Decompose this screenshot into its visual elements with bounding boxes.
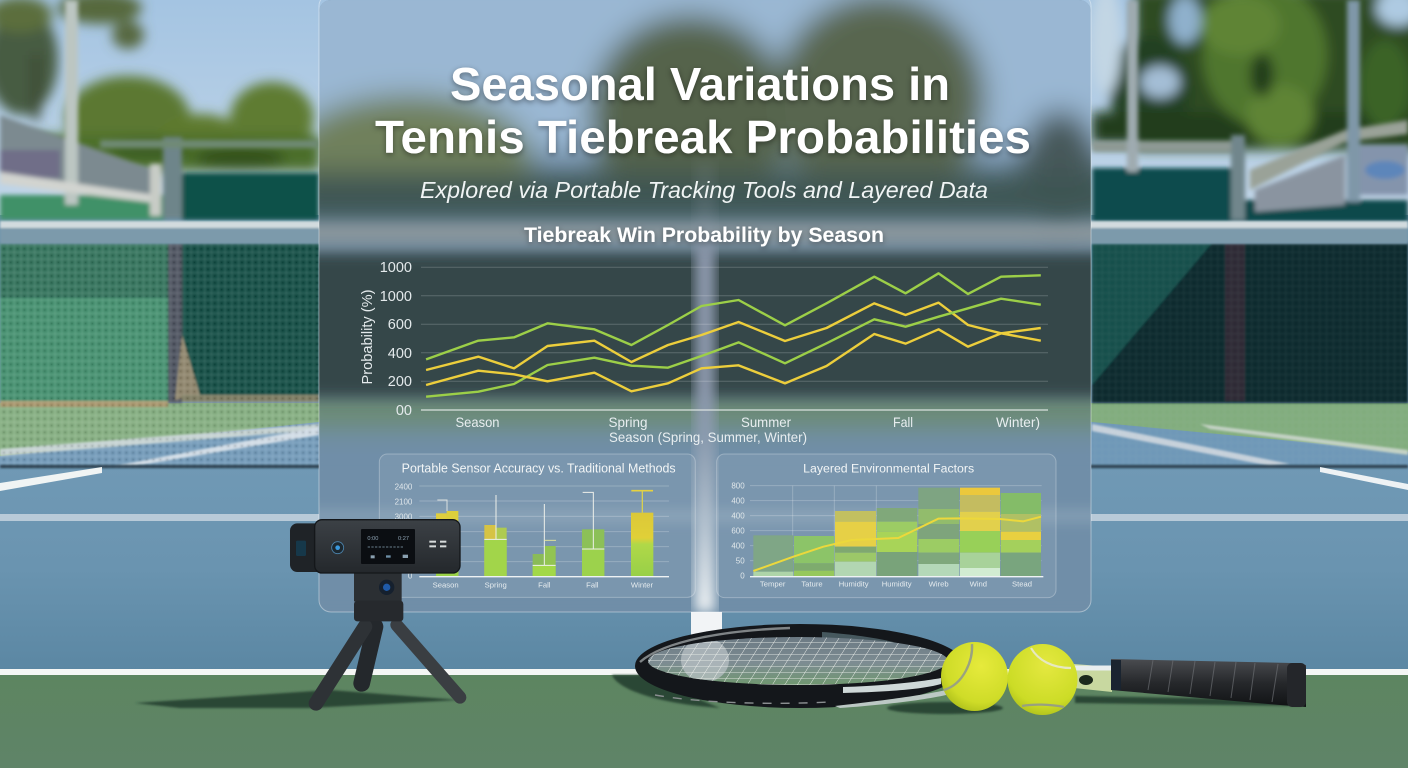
- factors y labels: 0: [740, 572, 745, 581]
- sensor grid: [419, 486, 669, 562]
- stacked columns: [753, 488, 1041, 576]
- icon: tennis ball right: [1008, 644, 1078, 715]
- racket logo: [1079, 675, 1093, 685]
- racket shaft: [1074, 664, 1112, 692]
- court lines: [0, 467, 1408, 521]
- factors x labels: Stead: [1012, 580, 1032, 589]
- right trees: [1090, 0, 1408, 150]
- net tape: [0, 221, 1408, 468]
- factors panel box: [717, 454, 1056, 598]
- factors x labels: Wind: [970, 580, 987, 589]
- panel: frosted glass card: [290, 0, 1120, 628]
- factors y labels: 400: [731, 542, 745, 551]
- green surround behind net: [0, 403, 1408, 467]
- y axis labels: 400: [388, 346, 412, 362]
- y axis labels: 200: [388, 374, 412, 390]
- x axis labels: Summer: [741, 414, 791, 430]
- tripod: [316, 625, 460, 703]
- icon: tennis ball left: [941, 642, 1008, 711]
- racket frame: [635, 624, 965, 708]
- x axis labels: Fall: [893, 414, 913, 430]
- panel backdrop: [290, 0, 1120, 628]
- camera screen: 0:27: [398, 536, 409, 542]
- factors x labels: Wireb: [929, 580, 949, 589]
- panel: layered environmental factors: [717, 454, 1056, 598]
- y axis labels: 1000: [380, 260, 412, 276]
- left fence and stands: [0, 0, 319, 220]
- net mesh right: [1092, 243, 1408, 467]
- y axis labels: 1000: [380, 289, 412, 305]
- y axis title: Probability (%): [360, 290, 376, 384]
- ground shadows: [135, 675, 1300, 714]
- net panels left: [0, 243, 319, 466]
- x axis labels: Winter): [996, 414, 1040, 430]
- sensor panel box: [379, 454, 695, 597]
- court surface: [0, 465, 1408, 671]
- baseline: [0, 669, 1408, 675]
- y axis labels: [380, 260, 412, 419]
- factors x labels: Humidity: [882, 580, 912, 589]
- sensor x labels: [433, 580, 654, 589]
- factors y labels: 600: [731, 527, 745, 536]
- factors axis: [750, 575, 1043, 579]
- blurred center post: [695, 160, 715, 612]
- x axis labels: Season: [456, 414, 500, 430]
- title: [375, 58, 1031, 163]
- y axis labels: 600: [388, 317, 412, 333]
- factors grid: [750, 486, 1042, 576]
- line chart heading: Tiebreak Win Probability by Season: [524, 224, 884, 247]
- camera screen: 0:00: [367, 536, 378, 542]
- sensor x labels: Winter: [631, 580, 654, 589]
- title: Tennis Tiebreak Probabilities: [375, 111, 1031, 163]
- sensor panel heading: Portable Sensor Accuracy vs. Traditional Methods: [402, 460, 676, 475]
- sensor y labels: 0: [408, 572, 413, 581]
- title: Seasonal Variations in: [450, 58, 950, 110]
- left trees: [0, 0, 320, 171]
- net mesh: [0, 243, 319, 467]
- sensor x labels: Spring: [485, 580, 507, 589]
- x axis labels: Spring: [608, 414, 648, 430]
- factors x labels: [760, 580, 1032, 589]
- sky: [0, 0, 1408, 215]
- factors y labels: 400: [731, 497, 745, 506]
- factors y labels: 50: [736, 557, 745, 566]
- sensor y labels: [395, 482, 413, 581]
- panel border: [319, 0, 1091, 612]
- line chart: tiebreak win probability: [360, 260, 1048, 445]
- sensor y labels: 2100: [395, 497, 413, 506]
- factors panel heading: Layered Environmental Factors: [803, 461, 974, 475]
- error whiskers: [437, 491, 653, 565]
- sensor y labels: 3000: [395, 512, 413, 521]
- sensor x labels: Season: [433, 580, 459, 589]
- icon: portable tracking sensor on tripod: [290, 520, 460, 703]
- factors x labels: Temper: [760, 580, 786, 589]
- center mark: [691, 610, 722, 636]
- camera body: [290, 520, 460, 573]
- sensor x labels: Fall: [538, 580, 551, 589]
- factors y labels: 400: [731, 512, 745, 521]
- sensor y labels: 2400: [395, 482, 413, 491]
- bars: [436, 511, 653, 576]
- icon: tennis racket: [635, 624, 1306, 708]
- racket rim highlight: [640, 628, 790, 662]
- ground: [0, 674, 1408, 768]
- net panels right: [1092, 243, 1408, 466]
- line chart grid: [421, 267, 1048, 381]
- racket strings: [648, 637, 946, 685]
- data lines: [426, 273, 1041, 397]
- x axis labels: [456, 414, 1040, 445]
- blue court behind net: [0, 422, 1408, 467]
- racket handle: [1111, 659, 1306, 707]
- panel: portable sensor accuracy: [379, 454, 695, 597]
- subtitle: Explored via Portable Tracking Tools and Layered Data: [420, 177, 988, 203]
- camera screen: [361, 529, 415, 564]
- sensor axis: [419, 575, 669, 579]
- factors y labels: 800: [731, 482, 745, 491]
- factors x labels: Tature: [801, 580, 823, 589]
- y axis labels: 00: [396, 403, 412, 419]
- line chart x axis: [421, 409, 1048, 411]
- sensor x labels: Fall: [586, 580, 599, 589]
- camera neck: [354, 571, 403, 621]
- factors x labels: Humidity: [839, 580, 869, 589]
- factors y labels: [731, 482, 745, 581]
- x axis labels: Season (Spring, Summer, Winter): [609, 429, 807, 445]
- trend line: [753, 517, 1041, 571]
- racket throat: [843, 678, 941, 693]
- right fence and stands: [1092, 0, 1408, 222]
